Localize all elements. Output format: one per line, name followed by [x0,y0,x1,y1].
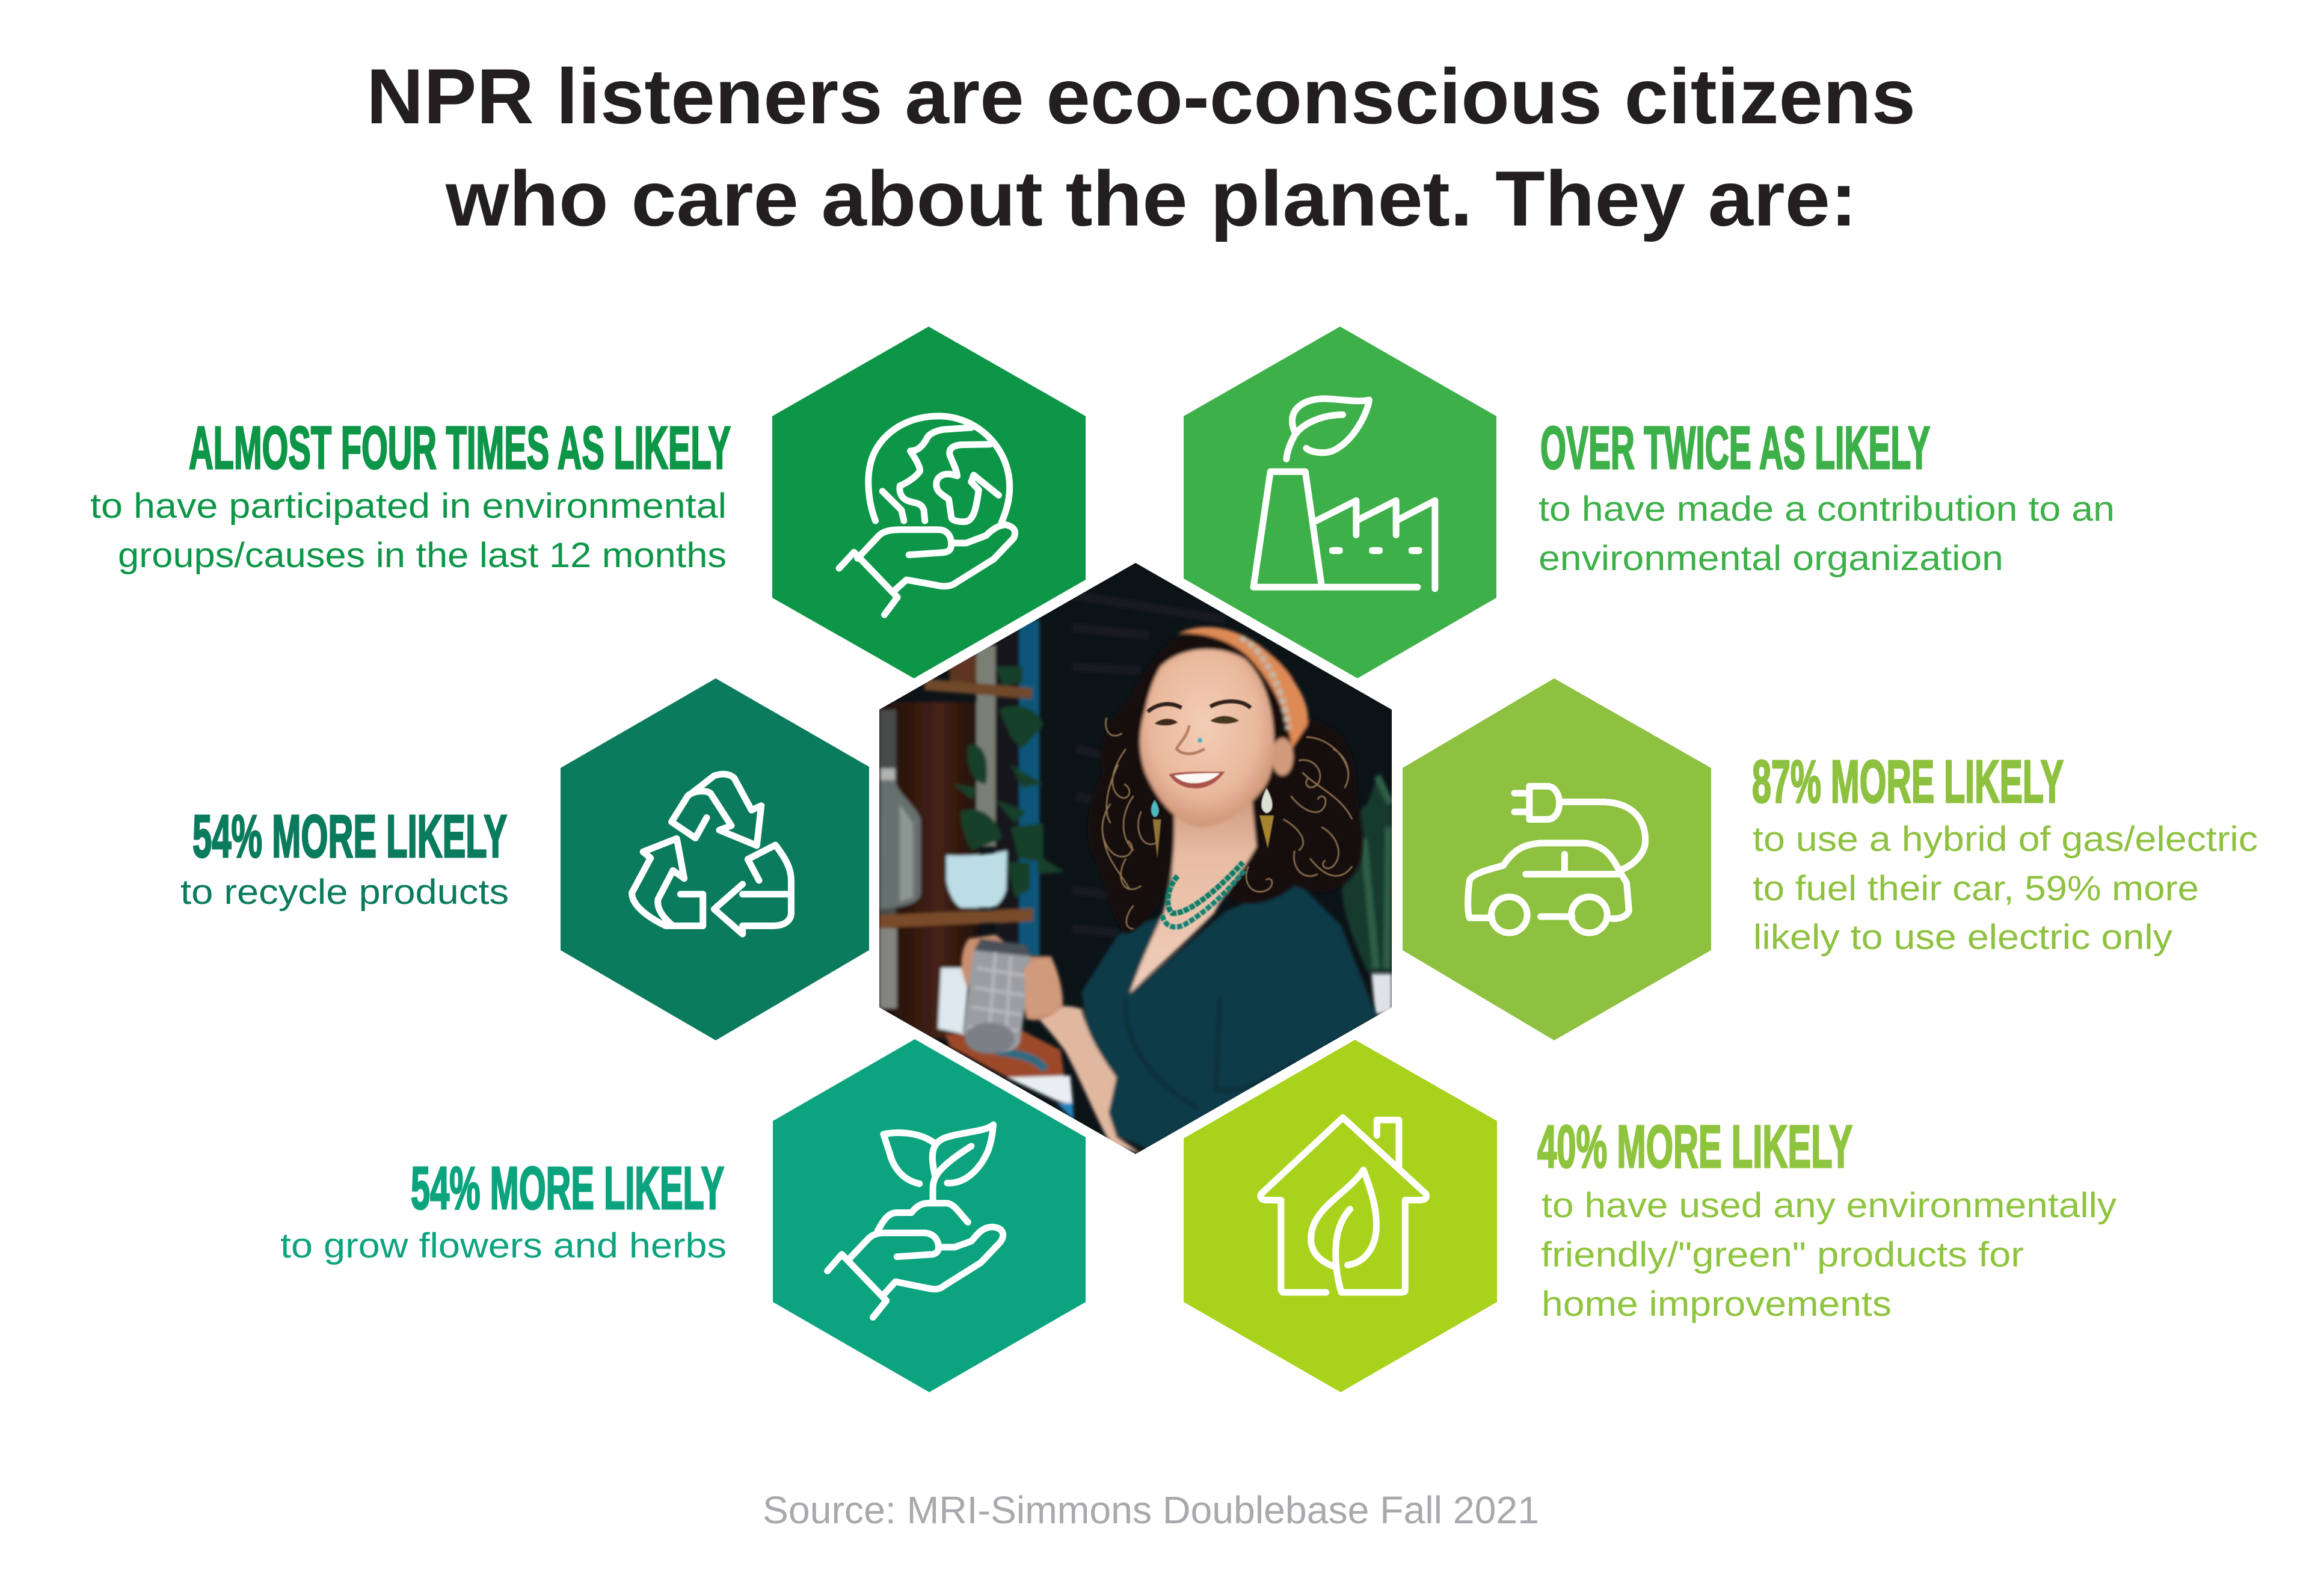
fingers [1024,960,1060,1019]
panel: environmental groups hexagon [772,327,1086,678]
ear [1271,738,1293,775]
hair mass [1088,633,1363,935]
panel: factory hexagon [1184,327,1496,678]
title: who care about the planet. They are: [445,155,1857,242]
curls [1102,717,1352,929]
callout: over twice as likely: to have made a contribution to an [1539,490,2115,529]
callout: 87% more likely [1752,748,2258,957]
icon: factory with leaf [1253,399,1435,589]
icon: recycle arrows [632,774,791,934]
forearm [1036,1006,1141,1154]
icon: sprout in hand [828,1125,1003,1318]
face [1140,649,1274,827]
callout: over twice as likely: environmental organization [1539,539,2003,578]
earrings [1151,800,1159,817]
brows and eyes [1148,701,1250,711]
callout: 40% more likely: home improvements [1542,1285,1892,1324]
photo: smiling woman holding a glass jar [865,553,1410,1164]
panel: green home hexagon [1184,1040,1497,1392]
callout: almost four times as likely: groups/causes in the last 12 months [118,536,727,575]
panel: recycling hexagon [561,678,869,1040]
title [366,52,1916,242]
callout: 40% more likely: 40% MORE LIKELY [1537,1113,1852,1181]
callout: 87% more likely: to use a hybrid of gas/electric [1753,820,2258,859]
dress [1082,881,1377,1150]
nose [1176,725,1205,754]
title: NPR listeners are eco-conscious citizens [366,52,1916,140]
callout: over twice as likely: OVER TWICE AS LIKELY [1540,414,1930,482]
icon: house with leaf [1261,1117,1426,1292]
neck and chest [1130,784,1256,993]
callout: 54% more likely to recycle [180,803,509,912]
panel: flowers and herbs hexagon [773,1039,1086,1392]
callout: 87% more likely: 87% MORE LIKELY [1752,748,2064,815]
source note: Source: MRI-Simmons Doublebase Fall 2021 [763,1488,1539,1532]
icon: electric car with plug [1468,786,1646,933]
callout: almost four times as likely: ALMOST FOUR TIMES AS LIKELY [189,414,731,482]
callout: 54% more likely to grow [280,1155,727,1265]
callout: 40% more likely: to have used any environmentally [1542,1186,2116,1225]
callout: 54% more likely to grow: 54% MORE LIKELY [411,1155,724,1222]
necklace [1168,862,1243,913]
callout: 87% more likely: to fuel their car, 59% more [1753,869,2199,908]
icon: globe in hand [839,416,1015,615]
callout: 40% more likely [1537,1113,2116,1324]
mouth [1169,772,1225,788]
callout: almost four times as likely: to have participated in environmental [90,487,727,526]
hand behind jar [962,935,1063,1021]
nose stud [1197,738,1202,743]
callout: over twice as likely [1539,414,2115,578]
callout: 40% more likely: friendly/"green" products for [1541,1235,2024,1274]
headband [1178,627,1308,749]
callout: 54% more likely to recycle: to recycle products [180,873,509,912]
callout: almost four times as likely [90,414,731,575]
callout: 87% more likely: likely to use electric only [1753,918,2172,957]
callout: 54% more likely to grow: to grow flowers and herbs [280,1226,727,1265]
panel: hybrid car hexagon [1403,678,1711,1040]
callout: 54% more likely to recycle: 54% MORE LIKELY [192,803,507,870]
jar [963,945,1031,1053]
